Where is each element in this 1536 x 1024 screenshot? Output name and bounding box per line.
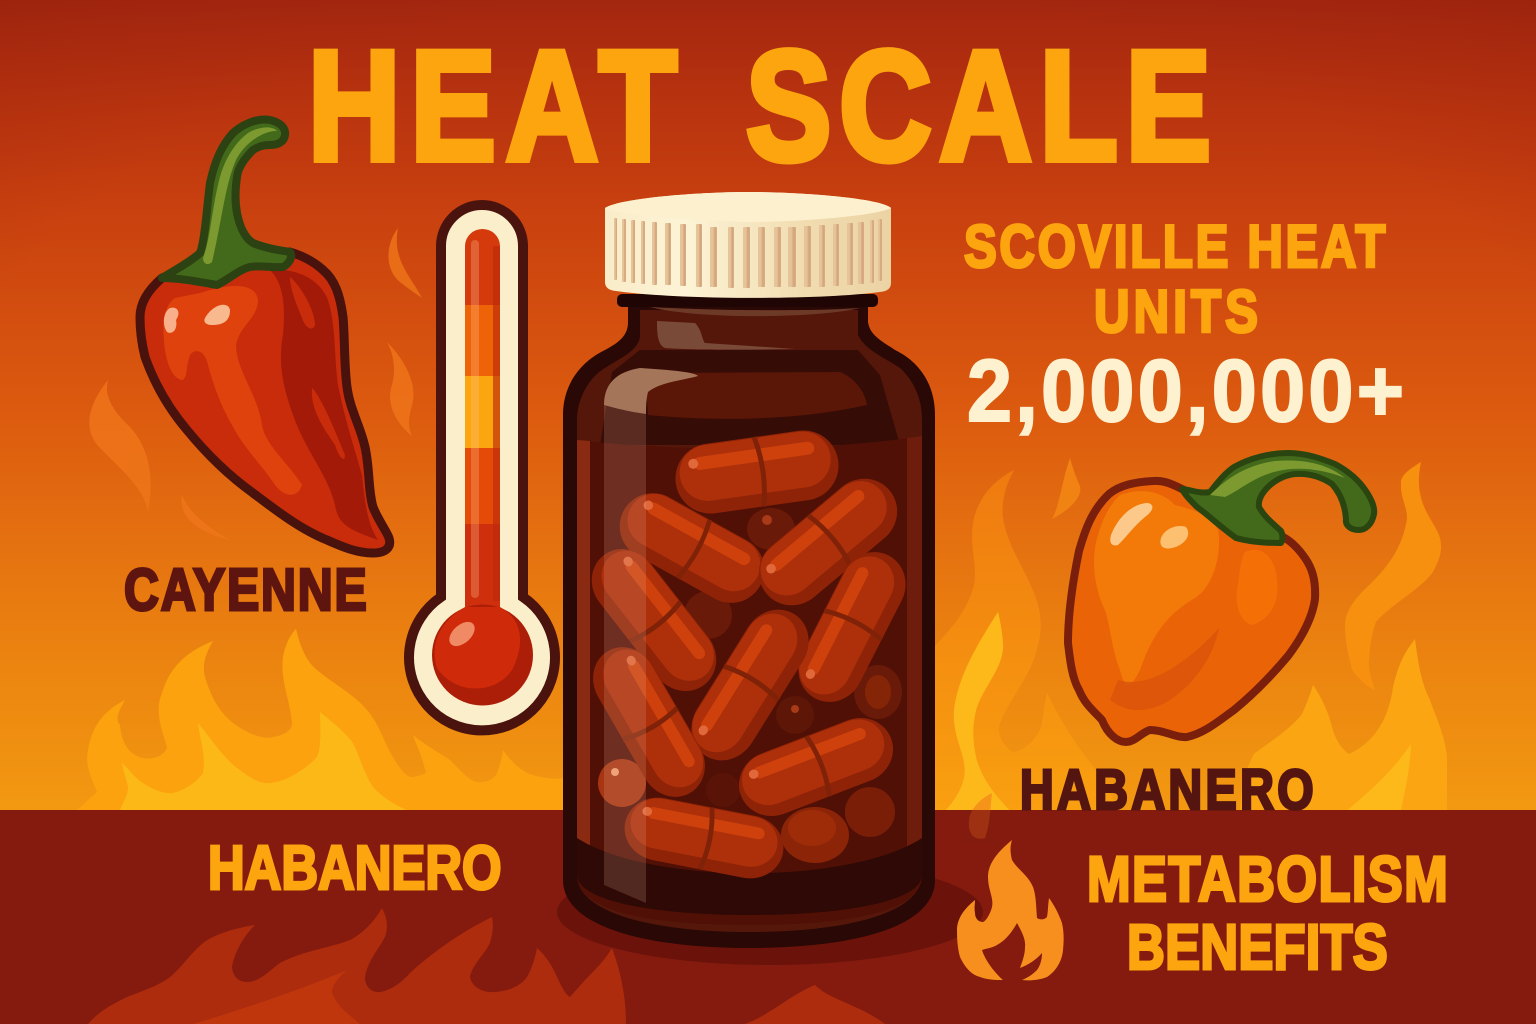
heading: HEAT SCALE	[308, 20, 1211, 193]
flames: right foreground	[935, 462, 1447, 815]
jar neck shadow	[600, 350, 900, 445]
text block: metabolism benefits: METABOLISM	[1087, 844, 1448, 915]
jar liquid side bands	[577, 440, 590, 890]
bottom band flames	[88, 908, 885, 1024]
habanero lighter lobe	[1094, 491, 1219, 685]
habanero stem highlight	[1210, 460, 1345, 497]
heading: HEAT SCALE: HEAT	[308, 20, 677, 193]
cayenne dark side	[270, 270, 378, 540]
heading: HEAT SCALE: SCALE	[746, 20, 1211, 193]
label: cayenne: CAYENNE	[124, 558, 367, 623]
cayenne stem	[162, 120, 291, 285]
jar dome reflection	[645, 372, 867, 419]
pepper: habanero	[1068, 453, 1374, 742]
text block: scoville heat units	[964, 212, 1385, 345]
jar neck highlights	[650, 307, 860, 316]
label: habanero left: HABANERO	[208, 834, 502, 903]
thermometer tube stripes	[465, 229, 500, 614]
background flames: pale flickers	[89, 228, 1080, 540]
label: habanero right: HABANERO	[1020, 759, 1314, 822]
jar shoulder highlight	[604, 368, 698, 414]
cayenne body	[140, 252, 390, 553]
supplement jar	[563, 192, 935, 948]
cayenne stem highlight	[203, 127, 277, 264]
number: 2,000,000+: 2,000,000+	[967, 341, 1404, 440]
right flame lower	[1254, 639, 1447, 815]
right flame brightest	[1342, 744, 1411, 815]
text block: metabolism benefits	[1087, 844, 1448, 983]
cayenne dark streak highlights	[290, 277, 315, 329]
left flame back layer	[77, 629, 563, 810]
thermometer	[409, 205, 555, 730]
text block: scoville heat units: SCOVILLE HEAT	[964, 212, 1385, 280]
jar liquid	[577, 436, 922, 925]
small round beads	[598, 508, 902, 863]
text block: scoville heat units: UNITS	[1094, 277, 1258, 345]
habanero highlights	[1110, 503, 1152, 545]
right flame left back	[935, 470, 1120, 815]
icon: flame	[957, 840, 1064, 980]
jar translucent reflection strip	[604, 405, 646, 903]
jar neck lip	[617, 294, 878, 307]
jar inner glass	[577, 310, 922, 932]
small flame: over band edge	[969, 793, 992, 839]
flames: left foreground	[77, 629, 563, 810]
thermometer bulb	[432, 604, 533, 706]
left flame yellow layer	[120, 712, 407, 810]
text block: metabolism benefits: BENEFITS	[1127, 912, 1388, 983]
right flame left yellow	[942, 612, 1014, 815]
cayenne bright lobe	[163, 286, 302, 495]
jar outer glass	[563, 300, 935, 948]
habanero shadow fold	[1110, 628, 1219, 710]
capsules	[578, 426, 917, 884]
pepper: cayenne	[140, 120, 390, 553]
lid ribs	[614, 218, 882, 288]
jar bottom dark	[577, 838, 922, 915]
right flame upper	[1345, 462, 1441, 690]
cayenne highlights	[164, 308, 178, 333]
bottom band	[0, 810, 1536, 1024]
habanero right lobe	[1237, 550, 1277, 625]
thermometer outer outline	[409, 205, 555, 730]
jar shadow	[557, 859, 983, 965]
habanero stem	[1182, 453, 1374, 543]
habanero body	[1068, 481, 1315, 742]
jar lid	[605, 192, 891, 298]
